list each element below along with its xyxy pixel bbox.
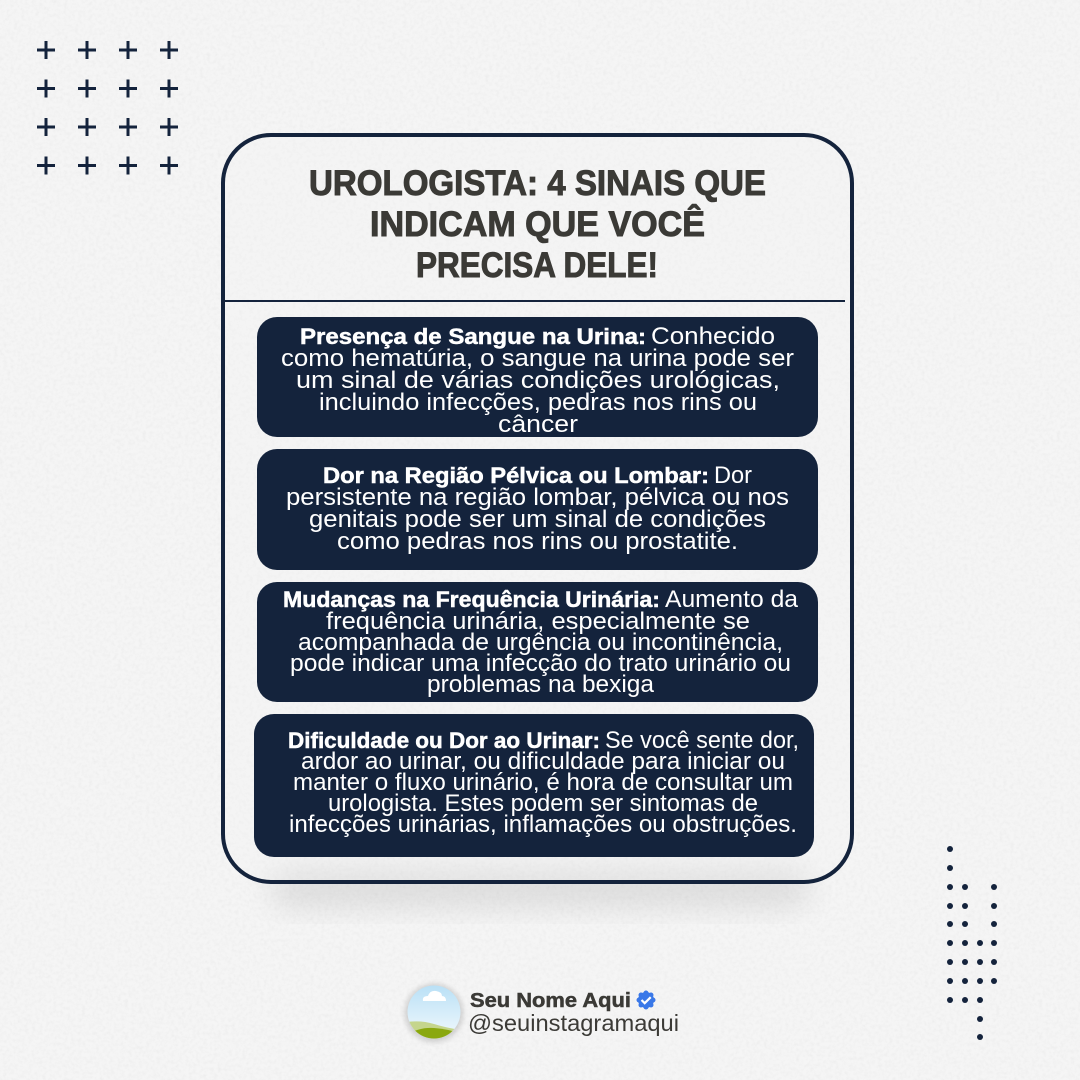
panel: dor pélvica ou lombar: Dor	[714, 462, 752, 489]
panel: frequência urinária: pode indicar uma infecção do trato urinário ou	[290, 650, 791, 677]
icon: dot grid decoration	[947, 846, 997, 1040]
title: UROLOGISTA: 4 SINAIS QUE	[309, 164, 766, 203]
panel: sangue na urina: Conhecido	[651, 323, 775, 350]
icon: profile avatar	[405, 984, 463, 1042]
panel: sangue na urina: como hematúria, o sangue na urina pode ser	[281, 345, 794, 372]
panel: dor pélvica ou lombar	[257, 449, 818, 570]
panel: dor pélvica ou lombar: genitais pode ser um sinal de condições	[309, 506, 766, 533]
panel: dificuldade ou dor ao urinar: urologista. Estes podem ser sintomas de	[328, 790, 758, 817]
panel: frequência urinária: Mudanças na Frequência Urinária:	[283, 587, 660, 612]
panel: frequência urinária	[257, 582, 818, 702]
title: INDICAM QUE VOCÊ	[370, 204, 705, 244]
panel: sangue na urina: Presença de Sangue na Urina:	[300, 324, 646, 349]
panel: dor pélvica ou lombar: Dor na Região Pélvica ou Lombar:	[323, 463, 709, 488]
panel: frequência urinária: frequência urinária, especialmente se	[326, 608, 750, 635]
title	[309, 164, 766, 285]
title: PRECISA DELE!	[416, 246, 658, 285]
panel: dificuldade ou dor ao urinar: ardor ao urinar, ou dificuldade para iniciar ou	[301, 748, 785, 775]
panel: dificuldade ou dor ao urinar: Se você sente dor,	[605, 727, 799, 754]
panel: dificuldade ou dor ao urinar: manter o fluxo urinário, é hora de consultar um	[293, 769, 793, 796]
panel: sangue na urina: um sinal de várias condições urológicas,	[296, 367, 780, 394]
panel: dor pélvica ou lombar: persistente na região lombar, pélvica ou nos	[286, 484, 789, 511]
icon: verified badge	[636, 990, 656, 1010]
panel: sangue na urina: câncer	[498, 411, 578, 438]
text: account name: Seu Nome Aqui	[470, 990, 631, 1012]
panel: dificuldade ou dor ao urinar: Dificuldade ou Dor ao Urinar:	[288, 728, 600, 753]
icon: plus grid decoration	[37, 41, 178, 174]
panel: dor pélvica ou lombar: como pedras nos rins ou prostatite.	[337, 528, 738, 555]
panel: sangue na urina: incluindo infecções, pedras nos rins ou	[319, 389, 757, 416]
panel: frequência urinária: acompanhada de urgência ou incontinência,	[298, 629, 783, 656]
text: instagram handle: @seuinstagramaqui	[468, 1010, 679, 1036]
panel: frequência urinária: problemas na bexiga	[427, 671, 655, 698]
panel: sangue na urina	[257, 317, 818, 438]
panel: dificuldade ou dor ao urinar: infecções urinárias, inflamações ou obstruções.	[289, 811, 797, 838]
panel: main card	[223, 135, 852, 906]
panel: dificuldade ou dor ao urinar	[254, 714, 814, 857]
panel: frequência urinária: Aumento da	[665, 586, 799, 613]
